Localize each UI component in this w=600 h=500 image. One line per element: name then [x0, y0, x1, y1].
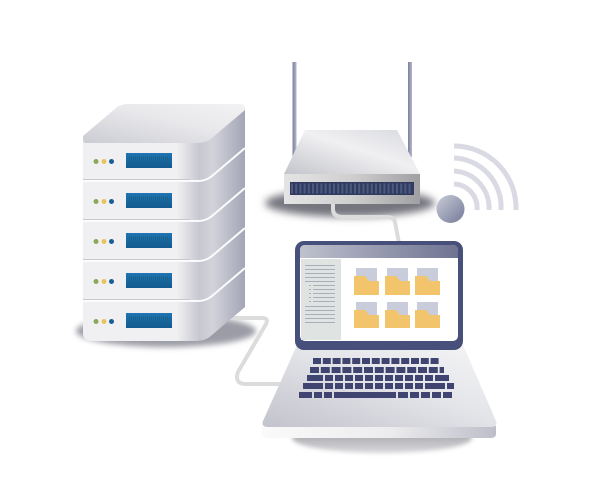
router front face [284, 174, 420, 204]
cable: router to laptop [333, 204, 399, 243]
server unit 3 controls [94, 233, 172, 248]
server top face [83, 104, 245, 143]
screen bezel [295, 241, 463, 350]
wifi ball [436, 195, 464, 223]
server unit 4 controls [94, 273, 172, 288]
folder row 1 [354, 268, 440, 295]
sidebar panel [301, 259, 341, 340]
laptop base [262, 345, 496, 438]
shadow: server [76, 315, 256, 347]
server unit 1 controls [94, 153, 172, 168]
router vent strip [290, 182, 414, 195]
shadow: laptop [292, 423, 472, 453]
router top face [284, 130, 420, 174]
laptop keyboard [299, 361, 459, 395]
router [284, 130, 420, 204]
server unit 2 controls [94, 193, 172, 208]
wifi signal arcs [454, 146, 516, 210]
cable: server to laptop [228, 318, 285, 384]
window title bar [300, 245, 458, 258]
laptop deck [263, 345, 496, 427]
router antennas [292, 62, 412, 157]
screen display [300, 245, 458, 341]
server body silhouette [83, 108, 245, 341]
folder grid [354, 268, 440, 328]
shadow: router [265, 189, 435, 217]
folder row 2 [354, 302, 440, 328]
server unit separators [83, 148, 245, 301]
server unit 5 controls [94, 313, 172, 328]
server rack [83, 104, 245, 341]
laptop front edge [262, 426, 496, 438]
laptop screen [295, 241, 463, 350]
